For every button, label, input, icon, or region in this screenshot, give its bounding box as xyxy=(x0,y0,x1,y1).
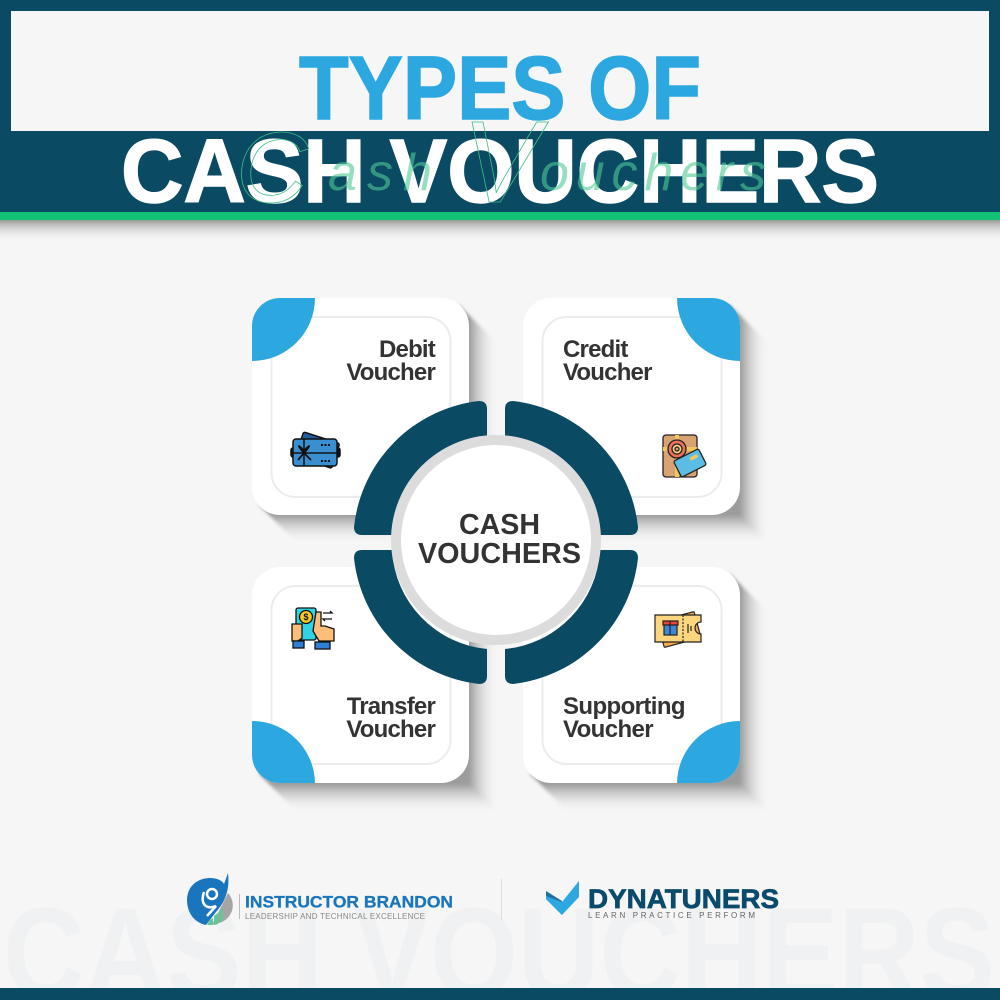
script overlay: ash xyxy=(328,144,432,202)
logo: dynatuners: DYNATUNERS xyxy=(588,884,779,914)
label: Voucher xyxy=(346,359,435,386)
logo: dynatuners xyxy=(546,881,779,920)
label: Voucher xyxy=(563,359,652,386)
icon: logo mark xyxy=(187,873,233,925)
center label: VOUCHERS xyxy=(418,538,581,570)
title: types of: TYPES OF xyxy=(299,39,701,139)
icon: gift ticket xyxy=(655,612,701,647)
logo: instructor brandon: LEADERSHIP AND TECHNICAL EXCELLENCE xyxy=(245,912,425,921)
panel: transfer voucher: $ xyxy=(303,612,309,622)
label: Supporting xyxy=(563,693,685,720)
label: Debit xyxy=(379,336,436,363)
arc: bottom left xyxy=(354,550,487,684)
panel: debit voucher xyxy=(252,298,498,544)
arc: top right xyxy=(505,401,638,535)
icon: phone transfer xyxy=(292,608,334,649)
arc: bottom right xyxy=(505,550,638,684)
panel: supporting voucher xyxy=(523,567,769,813)
logo: instructor brandon: INSTRUCTOR BRANDON xyxy=(245,894,453,912)
corner accent xyxy=(677,721,740,783)
logo: dynatuners: LEARN PRACTICE PERFORM xyxy=(588,911,755,920)
arc: top left xyxy=(354,401,487,535)
footer bar xyxy=(0,988,1000,1000)
script overlay: V xyxy=(462,97,549,227)
panel: transfer voucher xyxy=(252,567,498,813)
logo: instructor brandon xyxy=(187,873,453,925)
center circle xyxy=(391,435,601,645)
header band xyxy=(0,0,1000,242)
icon: gift box with card xyxy=(663,435,707,477)
title: cash vouchers: CASH VOUCHERS xyxy=(121,122,879,222)
label: Transfer xyxy=(347,693,435,720)
corner accent xyxy=(677,298,740,361)
icon: gift cards xyxy=(291,432,340,468)
panel: credit voucher xyxy=(523,298,769,544)
script overlay: ouchers xyxy=(540,144,766,202)
script overlay xyxy=(236,97,766,227)
script overlay: C xyxy=(236,112,309,224)
label: Credit xyxy=(563,336,628,363)
corner accent xyxy=(252,721,315,783)
label: Voucher xyxy=(346,716,435,743)
center label: CASH xyxy=(459,509,540,541)
corner accent xyxy=(252,298,315,361)
label: Voucher xyxy=(563,716,653,743)
icon: check mark xyxy=(546,881,579,915)
